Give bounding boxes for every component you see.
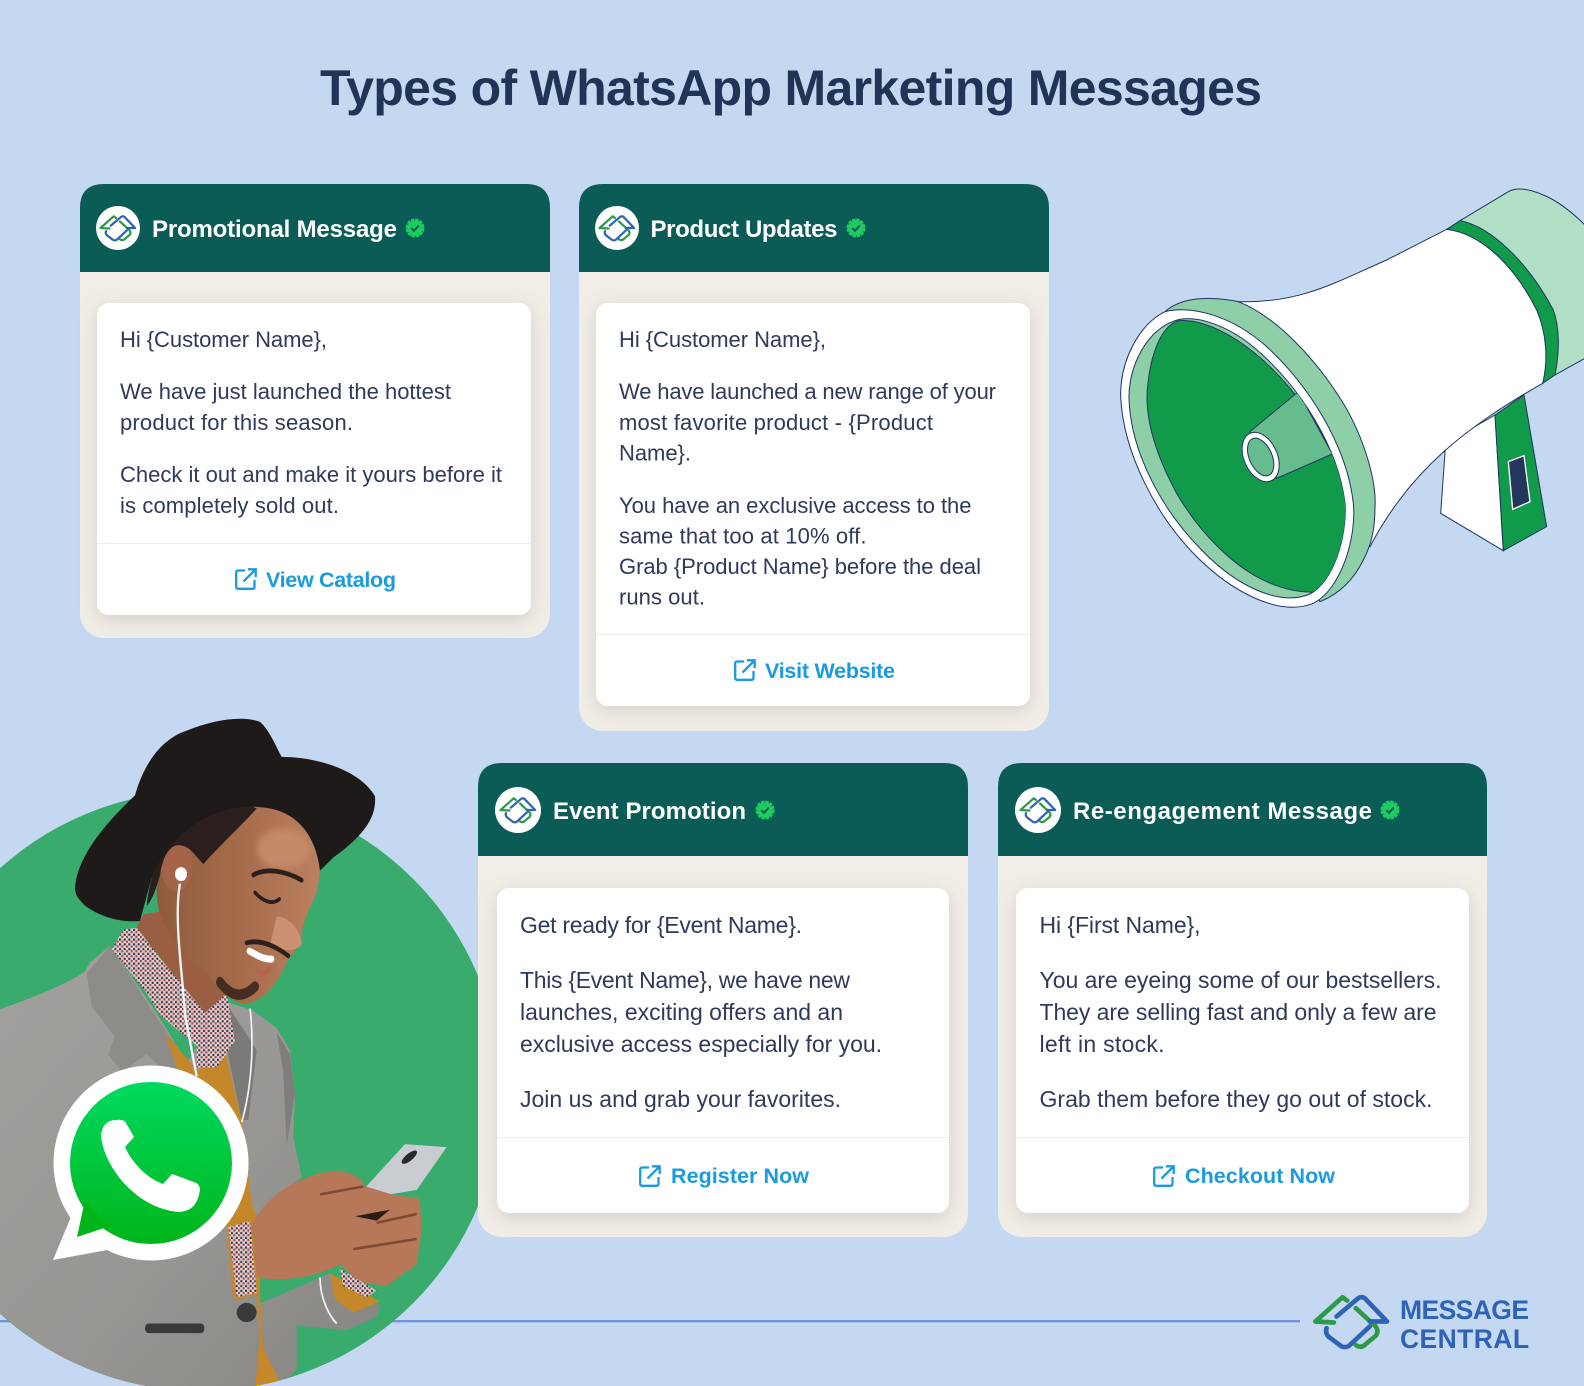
hands [252,1170,422,1286]
photo: man with phone [0,719,447,1386]
button: register now: Register Now [671,1164,809,1188]
earphone cables [175,867,337,1323]
ear [161,845,192,891]
message text [619,327,996,610]
header: product updates: Product Updates [650,216,838,243]
sweater [165,1032,380,1386]
header: re-engagement message: Re-engagement Message [1073,798,1372,825]
panel: re-engagement message [998,763,1487,1237]
message text [120,327,502,518]
message text: Hi {Customer Name}, [619,327,826,352]
megaphone back section [1460,189,1584,375]
message text: same that too at 10% off. [619,524,866,548]
message text: exclusive access especially for you. [520,1031,882,1057]
message text: is completely sold out. [120,493,339,518]
header: promotional message: Promotional Message [152,216,397,243]
message text: Grab them before they go out of stock. [1040,1086,1432,1112]
shirt collar [112,928,235,1068]
icon: whatsapp logo [53,1066,248,1260]
message text: Hi {Customer Name}, [120,327,327,352]
whatsapp handset [101,1120,200,1212]
megaphone body [1238,229,1546,547]
message text: most favorite product - {Product [619,410,933,435]
message text [520,912,882,1112]
message text: They are selling fast and only a few are [1040,999,1436,1025]
panel: promotional message [80,184,550,638]
neck [137,910,227,1015]
message text: This {Event Name}, we have new [520,967,850,993]
message text: You have an exclusive access to the [619,493,972,518]
nose [270,917,302,950]
megaphone green band [1447,221,1558,384]
megaphone flange [1165,298,1375,602]
message text: left in stock. [1040,1031,1164,1057]
button: visit website: Visit Website [765,659,895,683]
message text: runs out. [619,584,705,610]
header: product updates [579,184,1049,272]
header: re-engagement message [998,763,1487,856]
hat [75,719,375,921]
header: promotional message [80,184,550,272]
message text: Grab {Product Name} before the deal [619,554,981,579]
face [157,806,320,1004]
green circle [0,791,501,1386]
panel: event promotion [478,763,968,1237]
smartphone [365,1144,447,1194]
message text: launches, exciting offers and an [520,999,843,1025]
forehead highlight [257,829,310,868]
megaphone front rim [1121,310,1354,607]
message text: We have just launched the hottest [120,379,451,404]
message text: Name}. [619,440,691,466]
brand logo: message central: CENTRAL [1400,1324,1529,1354]
jacket buttons [145,1303,257,1333]
shirt cuffs [228,1221,257,1297]
megaphone cone interior [1147,320,1348,592]
message text: Check it out and make it yours before it [120,462,502,487]
facial features [220,871,302,995]
header: event promotion [478,763,968,856]
button: view catalog: View Catalog [266,568,396,592]
button: checkout now: Checkout Now [1185,1164,1335,1188]
megaphone driver ring [1235,426,1286,488]
brand logo: message central: MESSAGE [1400,1295,1529,1325]
message text [1040,912,1442,1112]
panel: product updates [579,184,1049,731]
title: Types of WhatsApp Marketing Messages [320,60,1262,116]
footer line [0,1320,1300,1322]
message text: product for this season. [120,410,353,435]
brand logo: message central [1315,1295,1529,1354]
megaphone stand [1441,395,1547,551]
message text: Get ready for {Event Name}. [520,912,802,938]
message text: You are eyeing some of our bestsellers. [1040,967,1442,993]
message text: Join us and grab your favorites. [520,1086,841,1112]
illustration: megaphone [1121,189,1584,607]
header: event promotion: Event Promotion [553,798,746,825]
jacket lapels [87,946,295,1146]
message text: Hi {First Name}, [1040,912,1200,938]
jacket [0,946,380,1386]
message text: We have launched a new range of your [619,379,996,404]
hair [147,805,257,906]
